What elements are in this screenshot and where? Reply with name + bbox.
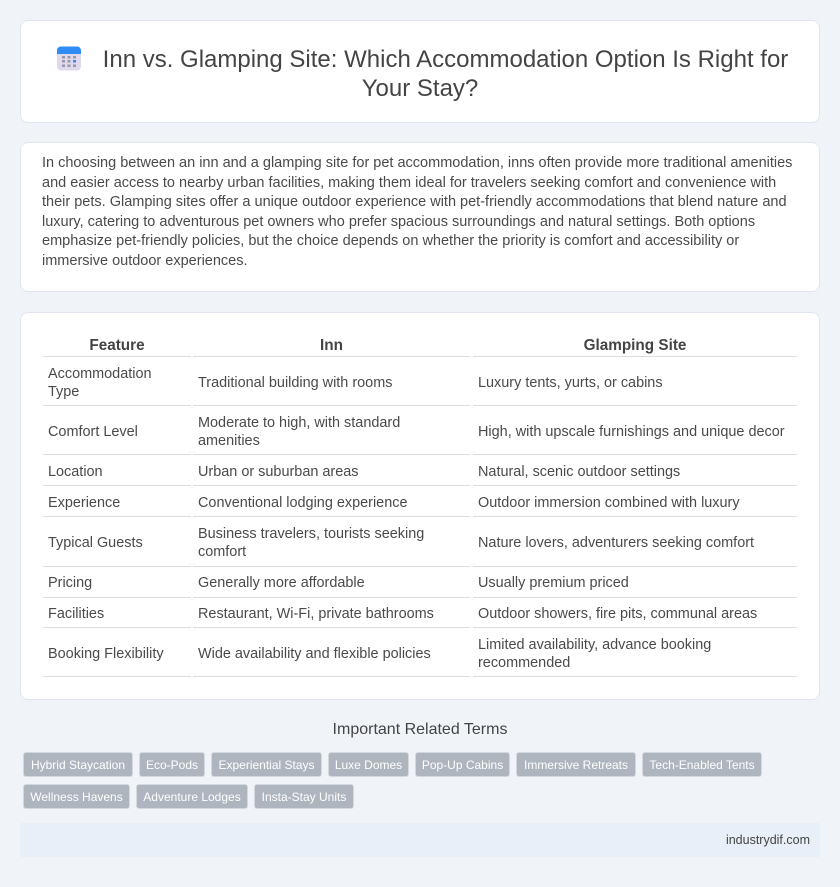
tags: related terms: Luxe Domes (335, 758, 402, 772)
row: booking flexibility: Booking Flexibility (48, 646, 164, 662)
text block: description: immersive outdoor experiences. (42, 252, 248, 268)
cell: High, with upscale furnishings and unique decor (478, 424, 785, 440)
cell: Business travelers, tourists seeking (198, 526, 424, 542)
title (103, 46, 788, 102)
panel: header (20, 20, 820, 123)
row: comfort level: Comfort Level (48, 424, 138, 440)
text block: description: emphasize pet-friendly policies, but the choice depends on whether the priority is comfort and accessibility or (42, 233, 739, 249)
table header: feature: Feature (89, 337, 145, 354)
cell (198, 526, 424, 560)
row: accommodation type (48, 366, 152, 400)
tags: related terms: Wellness Havens (30, 790, 123, 804)
title: Inn vs. Glamping Site: Which Accommodation Option Is Right for (103, 46, 788, 73)
tags: related terms (23, 752, 762, 809)
text block: description: luxury, catering to adventurous pet owners who prefer spacious surroundings and natural settings. Both options (42, 214, 755, 230)
text block: description: their pets. Glamping sites offer a unique outdoor experience with pet-friendly accommodations that blend nature and (42, 194, 787, 210)
tags: related terms: Pop-Up Cabins (422, 758, 503, 772)
cell: Moderate to high, with standard (198, 415, 400, 431)
panel: comparison table (20, 312, 820, 700)
row: accommodation type: Type (48, 384, 79, 400)
text block: description: and easier access to nearby urban facilities, making them ideal for travelers seeking comfort and convenience with (42, 174, 776, 190)
row: pricing: Pricing (48, 575, 92, 591)
cell (198, 415, 400, 449)
cell: Limited availability, advance booking (478, 637, 711, 653)
cell: Luxury tents, yurts, or cabins (478, 375, 663, 391)
cell: Urban or suburban areas (198, 464, 359, 480)
tags: related terms: Experiential Stays (218, 758, 315, 772)
cell: Wide availability and flexible policies (198, 646, 431, 662)
footer (20, 823, 820, 857)
cell: Nature lovers, adventurers seeking comfort (478, 535, 754, 551)
tags: related terms: Insta-Stay Units (262, 790, 346, 804)
cell (478, 637, 711, 671)
table header: glamping site: Glamping Site (584, 337, 686, 354)
cell: Natural, scenic outdoor settings (478, 464, 680, 480)
title: Your Stay? (362, 75, 478, 102)
cell: Conventional lodging experience (198, 495, 408, 511)
tags: related terms: Hybrid Staycation (31, 758, 125, 772)
row: typical guests: Typical Guests (48, 535, 143, 551)
cell: Restaurant, Wi-Fi, private bathrooms (198, 606, 434, 622)
footer: site name: industrydif.com (726, 833, 810, 847)
tags: related terms: Tech-Enabled Tents (649, 758, 755, 772)
cell: comfort (198, 544, 246, 560)
table header: inn: Inn (320, 337, 343, 354)
heading: related terms: Important Related Terms (333, 721, 507, 738)
cell: Generally more affordable (198, 575, 365, 591)
icon: calendar (57, 46, 81, 70)
text block: description (42, 155, 792, 268)
cell: Traditional building with rooms (198, 375, 392, 391)
cell: Usually premium priced (478, 575, 629, 591)
tags: related terms: Immersive Retreats (524, 758, 628, 772)
cell: amenities (198, 433, 260, 449)
row: facilities: Facilities (48, 606, 104, 622)
text block: description: In choosing between an inn and a glamping site for pet accommodation, inns often provide more traditional amenities (42, 155, 792, 171)
tags: related terms: Eco-Pods (146, 758, 198, 772)
panel: description (20, 142, 820, 292)
row: location: Location (48, 464, 103, 480)
cell: recommended (478, 655, 570, 671)
cell: Outdoor showers, fire pits, communal areas (478, 606, 757, 622)
row: accommodation type: Accommodation (48, 366, 152, 382)
row: experience: Experience (48, 495, 120, 511)
tags: related terms: Adventure Lodges (143, 790, 241, 804)
cell: Outdoor immersion combined with luxury (478, 495, 740, 511)
